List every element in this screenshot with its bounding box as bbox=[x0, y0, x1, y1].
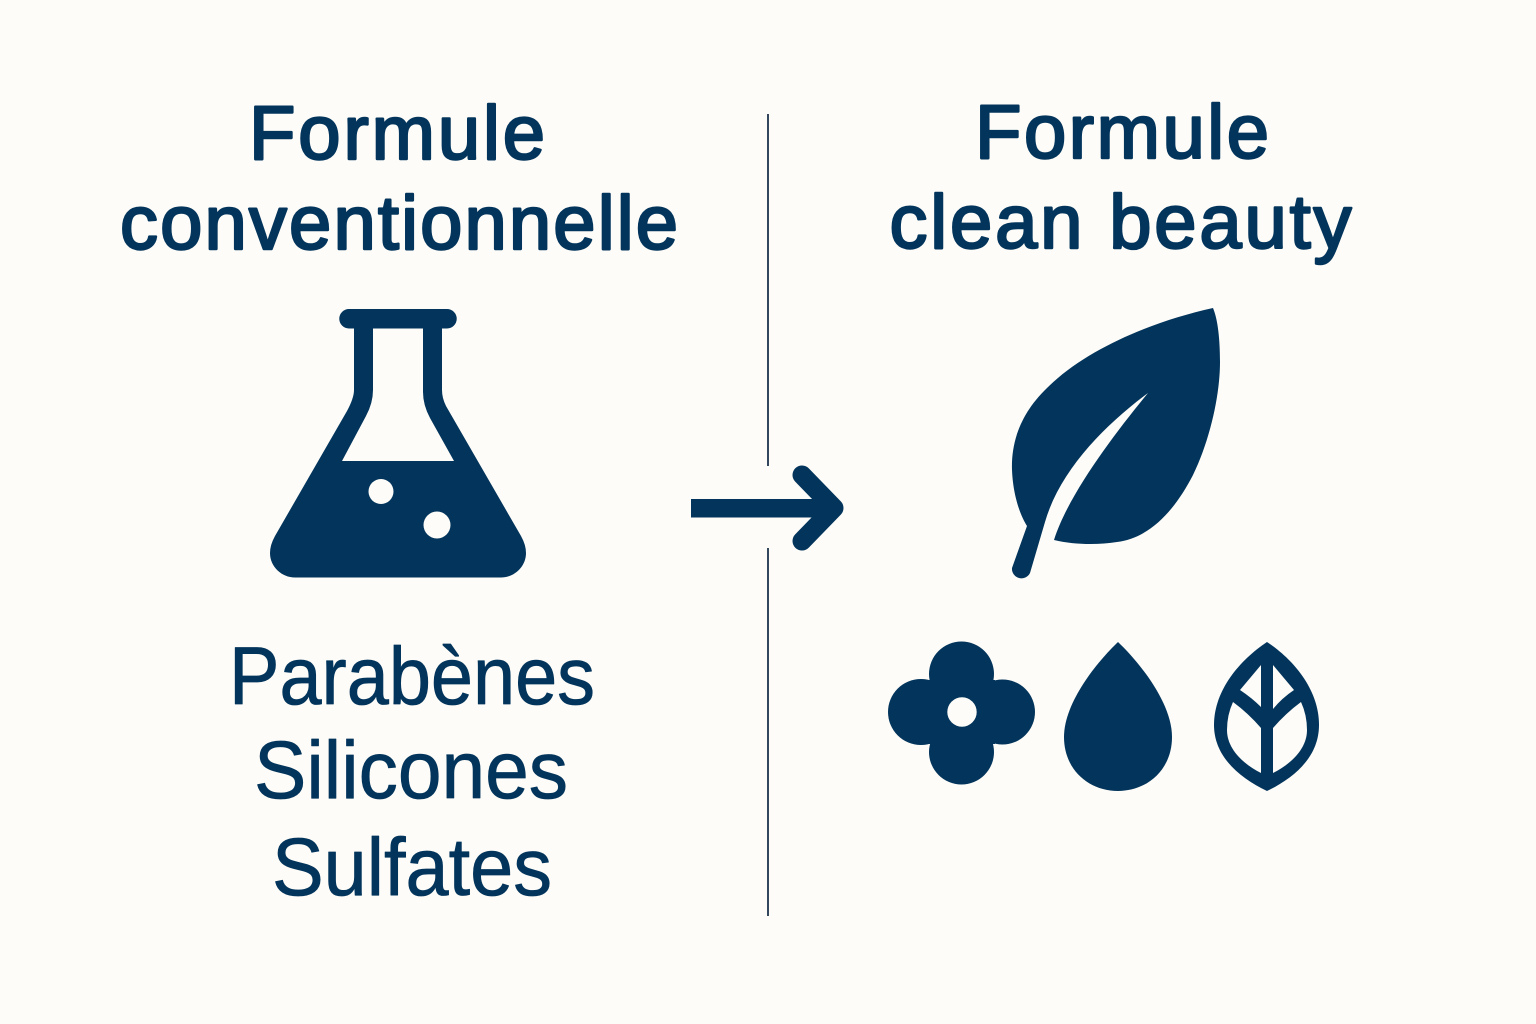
heading: clean beauty formula bbox=[890, 90, 1352, 265]
ingredient list: Parabènes bbox=[229, 631, 595, 722]
icon: large leaf bbox=[1012, 308, 1220, 578]
arrow bbox=[691, 475, 834, 541]
heading: clean beauty formula: clean beauty bbox=[890, 180, 1352, 265]
ingredient list: Sulfates bbox=[272, 822, 552, 913]
heading: conventional formula: conventionnelle bbox=[120, 181, 678, 266]
icon: outlined leaf bbox=[1214, 642, 1319, 791]
heading: clean beauty formula: Formule bbox=[975, 90, 1269, 175]
ingredient list bbox=[229, 631, 595, 913]
icon: flask bbox=[270, 309, 526, 578]
heading: conventional formula: Formule bbox=[249, 91, 545, 176]
ingredient list: Silicones bbox=[254, 725, 568, 816]
icon: water drop bbox=[1064, 642, 1172, 791]
heading: conventional formula bbox=[120, 91, 678, 266]
icon: flower bbox=[888, 642, 1035, 784]
divider bbox=[767, 114, 769, 916]
